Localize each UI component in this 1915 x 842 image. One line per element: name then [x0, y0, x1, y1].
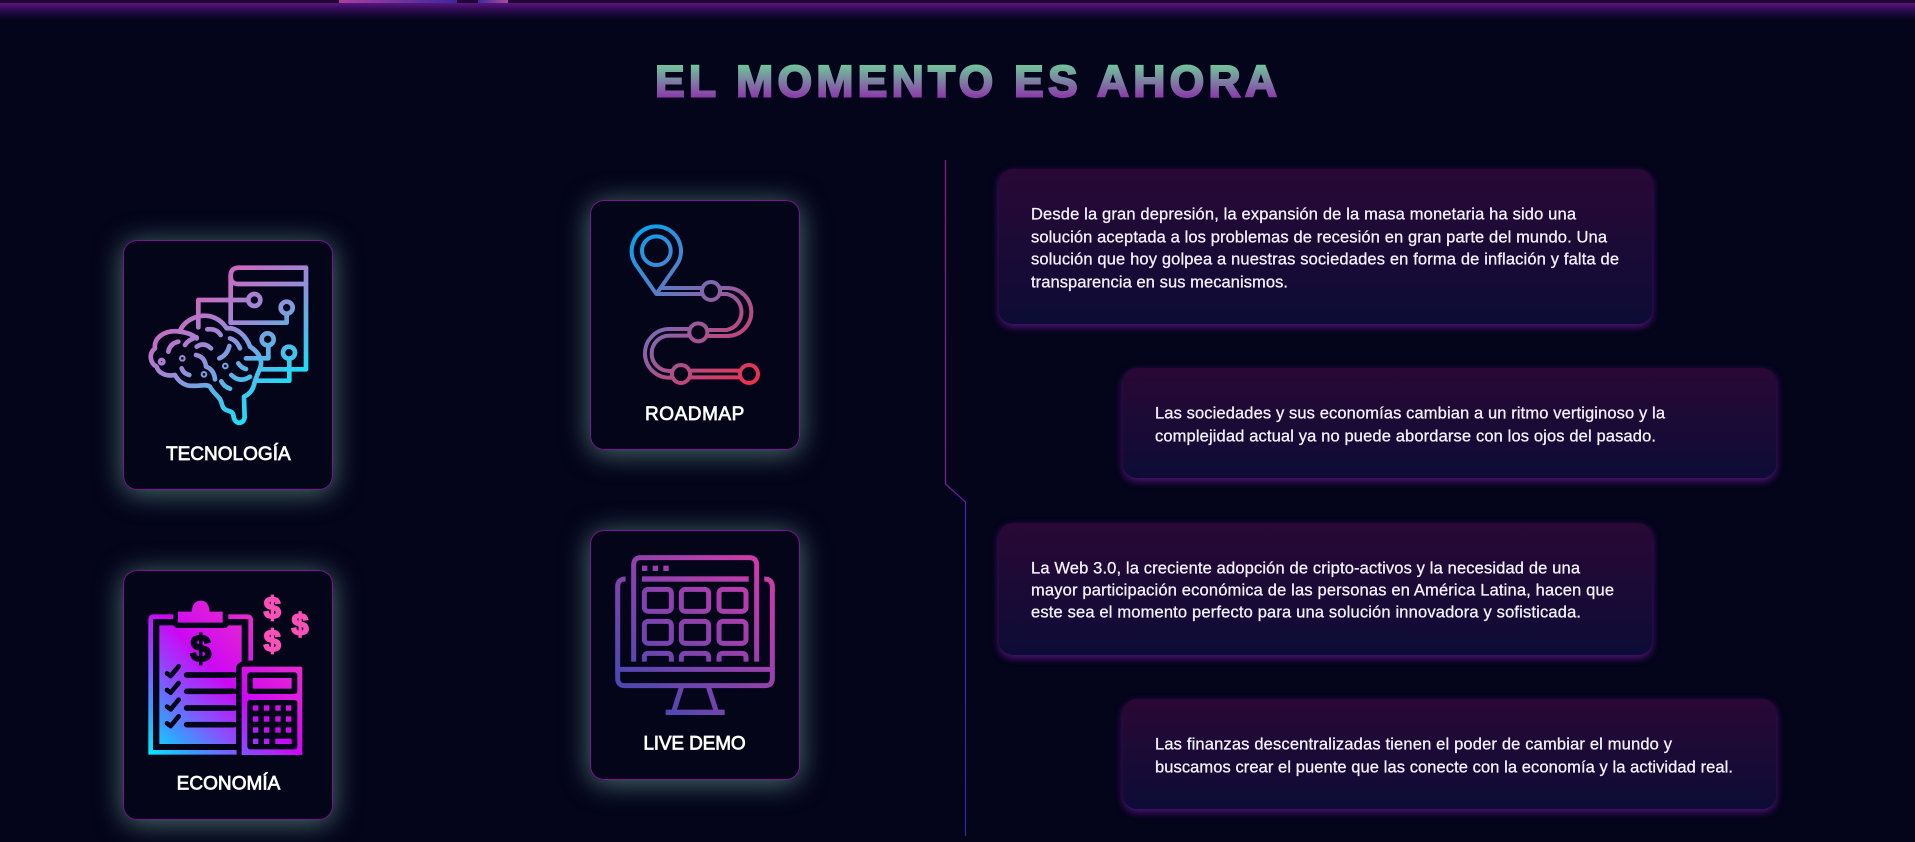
text block: gran depresión: transparencia en sus mecanismos. — [1031, 273, 1288, 291]
icon: clipboard and calculator: $ — [291, 607, 309, 641]
label: live demo: LIVE DEMO — [643, 733, 746, 754]
timeline connector line — [944, 160, 966, 836]
icon: clipboard and calculator: $ — [190, 629, 211, 671]
text block: sociedades — [1155, 405, 1666, 446]
text block: web 3.0: este sea el momento perfecto para una solución innovadora y sofisticada. — [1031, 603, 1581, 621]
label: economía: ECONOMÍA — [177, 773, 281, 794]
text block: gran depresión: solución aceptada a los problemas de recesión en gran parte del mundo. Una — [1031, 228, 1608, 246]
text block: web 3.0: La Web 3.0, la creciente adopción de cripto-activos y la necesidad de una — [1031, 559, 1581, 577]
panel: sociedades — [1123, 368, 1776, 478]
card: roadmap — [590, 200, 800, 450]
icon: route map — [632, 226, 758, 383]
text block: sociedades: Las sociedades y sus economías cambian a un ritmo vertiginoso y la — [1155, 405, 1666, 423]
text block: gran depresión: Desde la gran depresión, la expansión de la masa monetaria ha sido una — [1031, 205, 1577, 223]
panel: gran depresión — [999, 169, 1652, 324]
icon: clipboard and calculator: $ — [264, 591, 281, 625]
text block: web 3.0: mayor participación económica de las personas en América Latina, hacen que — [1031, 581, 1614, 599]
text block: finanzas descentralizadas: buscamos crear el puente que las conecte con la economía y la actividad real. — [1155, 758, 1733, 776]
text block: finanzas descentralizadas — [1155, 735, 1733, 776]
icon: brain with circuits — [151, 268, 306, 423]
text block: gran depresión: solución que hoy golpea a nuestras sociedades en forma de inflación y falta de — [1031, 250, 1619, 268]
card: live demo — [590, 530, 800, 780]
text block: gran depresión — [1031, 205, 1619, 291]
label: tecnología: TECNOLOGÍA — [166, 444, 291, 465]
panel: web 3.0 — [999, 523, 1652, 655]
top navigation bar — [0, 0, 1915, 18]
icon: clipboard and calculator — [151, 591, 309, 756]
text block: finanzas descentralizadas: Las finanzas descentralizadas tienen el poder de cambiar el mundo y — [1155, 735, 1673, 753]
card: tecnología — [123, 240, 333, 490]
title: EL MOMENTO ES AHORA — [655, 58, 1277, 106]
label: roadmap: ROADMAP — [645, 404, 744, 425]
panel: finanzas descentralizadas — [1123, 699, 1776, 809]
text block: web 3.0 — [1031, 559, 1614, 621]
card: economía — [123, 570, 333, 820]
icon: monitor dashboard — [618, 558, 772, 715]
icon: clipboard and calculator: $ — [264, 624, 281, 658]
text block: sociedades: complejidad actual ya no puede abordarse con los ojos del pasado. — [1155, 428, 1656, 446]
